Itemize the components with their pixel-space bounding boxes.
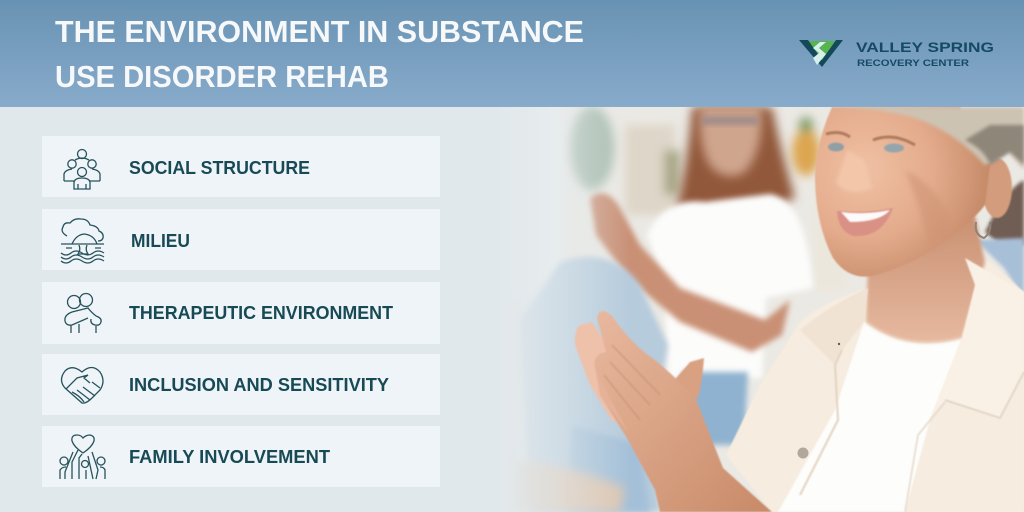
logo mark — [799, 40, 843, 67]
label: SOCIAL STRUCTURE — [129, 157, 310, 178]
logo text: VALLEY SPRING — [856, 39, 994, 55]
label: THERAPEUTIC ENVIRONMENT — [129, 302, 394, 323]
icon: heart handshake — [62, 368, 103, 403]
collar — [800, 288, 868, 365]
earring — [976, 222, 990, 238]
nose — [836, 150, 872, 192]
photo: women clapping — [522, 107, 1024, 512]
label: FAMILY INVOLVEMENT — [129, 446, 331, 467]
title — [55, 14, 584, 94]
panel: inclusion and sensitivity — [42, 354, 440, 415]
ear — [982, 158, 1012, 218]
main woman jacket — [726, 250, 1024, 512]
background room — [567, 107, 834, 279]
eyes — [826, 133, 915, 152]
background woman — [590, 107, 813, 445]
third person behind — [985, 180, 1024, 245]
panel: social structure — [42, 136, 440, 197]
icon: hands raising heart — [60, 435, 105, 479]
cheek wrinkles shadow — [907, 173, 940, 225]
hair — [854, 107, 1024, 170]
face — [815, 107, 990, 277]
foreground blurred person — [515, 257, 668, 512]
logo — [799, 39, 994, 69]
header bar — [0, 0, 1024, 107]
label: MILIEU — [131, 230, 190, 251]
icon: clouds, sun and waves — [61, 219, 104, 263]
mouth — [837, 208, 893, 236]
clapping hands — [575, 311, 772, 512]
icon: group of people — [64, 150, 100, 189]
panel: family involvement — [42, 426, 440, 487]
left fade — [440, 107, 630, 512]
panel: therapeutic environment — [42, 282, 440, 344]
t-shirt — [778, 322, 962, 512]
neck — [866, 215, 985, 342]
icon: hugging people — [65, 294, 101, 333]
title: USE DISORDER REHAB — [55, 59, 389, 94]
panel: milieu — [42, 209, 440, 270]
title: THE ENVIRONMENT IN SUBSTANCE — [55, 14, 584, 49]
logo: RECOVERY CENTER — [857, 58, 969, 69]
label: INCLUSION AND SENSITIVITY — [129, 374, 390, 395]
